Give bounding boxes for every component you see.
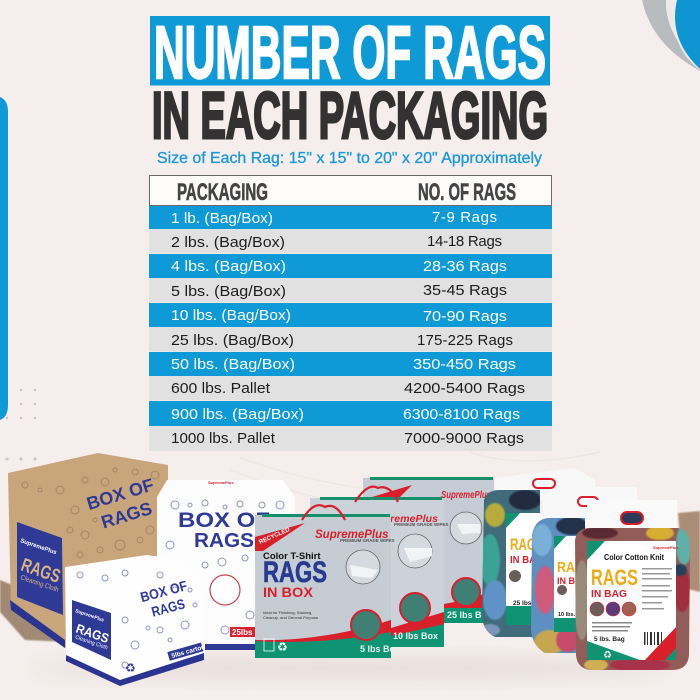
small box print xyxy=(138,577,194,622)
subtitle: Size of Each Rag: 15" x 15" to 20" x 20" Approximately xyxy=(157,150,542,167)
product: 10 lbs t-shirt box: 10 lbs Box xyxy=(393,631,438,641)
5 lbs bag card: RAGS xyxy=(591,565,638,590)
product: 5 lbs t-shirt box: SupremePlus xyxy=(315,529,388,541)
table rows xyxy=(149,206,552,451)
cardboard box print xyxy=(84,475,163,535)
product: large cardboard box xyxy=(8,453,168,648)
dot grid xyxy=(6,389,36,460)
product: 5 lbs t-shirt box: ♻ xyxy=(277,640,288,654)
product: 5 lbs t-shirt box xyxy=(255,505,400,658)
table rows: 6300-8100 Rags xyxy=(403,406,520,423)
table header: NO. OF RAGS xyxy=(418,179,516,206)
product: 5 lbs t-shirt box: PREMIUM GRADE WIPES xyxy=(340,538,395,543)
cardboard box label: RAGS xyxy=(18,555,63,588)
small box print: RAGS xyxy=(150,595,187,620)
cardboard box label: SupremePlus xyxy=(19,538,58,556)
left accent bar xyxy=(0,97,8,420)
product: 10 lbs bag: 10 lbs. xyxy=(558,612,576,618)
product: 5 lbs t-shirt box: RAGS xyxy=(263,556,327,589)
table rows: 5 lbs. (Bag/Box) xyxy=(171,283,286,300)
small box print: BOX OF xyxy=(138,577,189,605)
table rows: 28-36 Rags xyxy=(423,258,507,275)
product: 10 lbs bag: IN B xyxy=(557,576,576,586)
table rows: 1000 lbs. Pallet xyxy=(171,430,276,447)
recycled ribbon xyxy=(255,523,305,551)
product: 5 lbs t-shirt box: Ideal for Finishing, Staining, xyxy=(263,610,312,615)
5 lbs bag card: ♻ xyxy=(603,650,612,661)
product: white 25 lb box: SupremePlus xyxy=(208,480,234,485)
table header: PACKAGING xyxy=(177,179,268,206)
product: 25 lbs t-shirt box: SupremePlus xyxy=(441,489,491,501)
product: 25 lbs t-shirt box xyxy=(363,477,494,623)
white box print: RAGS xyxy=(194,530,254,552)
decorative corner swoosh xyxy=(642,0,700,71)
product: 10 lbs t-shirt box xyxy=(310,487,449,647)
product: small white box xyxy=(65,555,206,686)
table rows: 1 lb. (Bag/Box) xyxy=(171,210,273,227)
product: 10 lbs t-shirt box: PREMIUM GRADE WIPES xyxy=(394,522,449,527)
table rows: 4200-5400 Rags xyxy=(404,380,525,397)
table rows: 600 lbs. Pallet xyxy=(171,380,271,397)
5 lbs bag card: SupremePlus xyxy=(653,545,679,550)
product: 5 lbs t-shirt box: Cleanup, and General Purpose xyxy=(263,615,319,620)
table rows: 35-45 Rags xyxy=(423,282,507,299)
small box label: SupremePlus xyxy=(74,608,105,624)
product: white 25 lb box xyxy=(157,480,295,650)
cardboard box print: BOX OF xyxy=(84,475,156,514)
small box weight tag: 5lbs carton xyxy=(171,644,206,660)
recycled ribbon: RECYCLED xyxy=(258,527,292,546)
product: 25 lbs bag xyxy=(480,468,595,640)
small box label: RAGS xyxy=(74,621,111,646)
product: 5 lbs t-shirt box: 5 lbs Box xyxy=(360,644,400,654)
table rows: 7000-9000 Rags xyxy=(404,430,524,447)
table rows: 900 lbs. (Bag/Box) xyxy=(171,406,304,423)
white box window xyxy=(210,575,240,605)
white box print: BOX OF xyxy=(178,509,270,532)
table rows: 10 lbs. (Bag/Box) xyxy=(171,307,291,324)
table rows: 350-450 Rags xyxy=(413,356,516,373)
product: 25 lbs bag: IN BA xyxy=(510,555,536,566)
table rows: 70-90 Rags xyxy=(423,308,507,325)
recycle and box icons xyxy=(264,639,274,651)
product: 5 lbs t-shirt box: IN BOX xyxy=(263,584,314,600)
table rows: 7-9 Rags xyxy=(432,209,497,226)
table rows: 25 lbs. (Bag/Box) xyxy=(171,332,294,349)
product: 25 lbs bag: RAG xyxy=(510,535,536,554)
table rows: 175-225 Rags xyxy=(417,332,513,349)
table rows: 2 lbs. (Bag/Box) xyxy=(171,234,285,251)
5 lbs bag card: 5 lbs. Bag xyxy=(594,636,625,643)
product: 25 lbs bag: 25 lbs. xyxy=(513,600,533,607)
table rows: 14-18 Rags xyxy=(427,233,502,250)
5 lbs bag card: IN BAG xyxy=(591,588,627,600)
white box print xyxy=(178,509,270,552)
cardboard box label: Cleaning Cloth xyxy=(19,574,59,594)
5 lbs bag card xyxy=(587,541,679,661)
product: 10 lbs bag xyxy=(530,487,637,655)
cardboard box print: RAGS xyxy=(99,498,154,532)
small box label: Cleaning Cloth xyxy=(74,635,108,651)
background wood accents xyxy=(0,452,700,642)
table xyxy=(149,176,552,451)
title xyxy=(150,11,550,152)
table header xyxy=(150,176,552,206)
small box label xyxy=(66,600,116,660)
barcode xyxy=(644,632,662,645)
table rows: 50 lbs. (Bag/Box) xyxy=(171,356,295,373)
product ground shadow xyxy=(30,658,670,678)
product: 5 lbs t-shirt box: Color T-Shirt xyxy=(263,551,321,562)
product: 10 lbs bag: RA xyxy=(557,559,575,576)
cardboard box label xyxy=(8,522,71,615)
product: 25 lbs t-shirt box: 25 lbs Box xyxy=(447,610,492,620)
recycle icon: ♻ xyxy=(125,661,136,675)
table rows: 4 lbs. (Bag/Box) xyxy=(171,258,286,275)
product: 10 lbs t-shirt box: SupremePlus xyxy=(370,513,438,525)
white box weight tag: 25lbs xyxy=(232,628,253,637)
product: 5 lbs bag xyxy=(574,500,692,672)
cardboard pattern xyxy=(22,468,159,558)
5 lbs bag card: Color Cotton Knit xyxy=(604,553,664,562)
